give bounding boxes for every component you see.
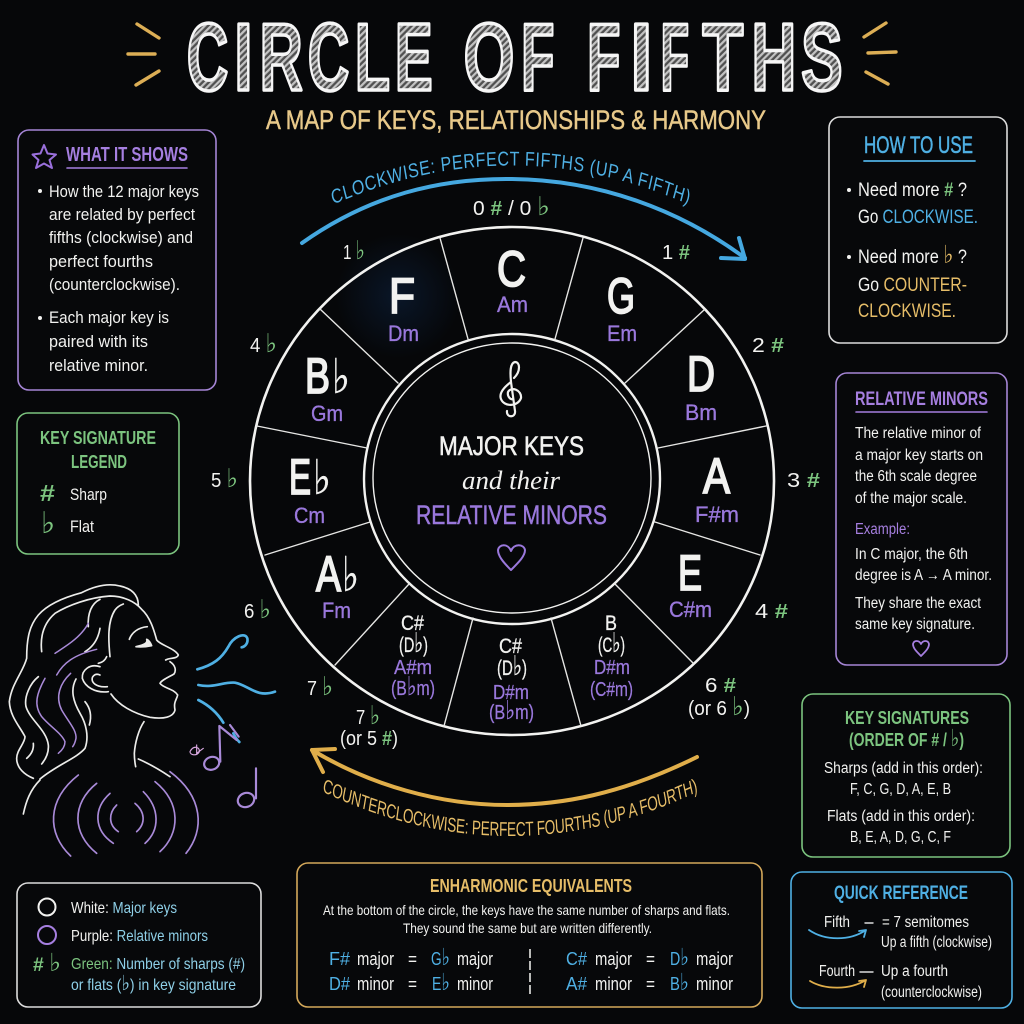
row: F sharp and G flat: G♭ <box>431 943 450 971</box>
panel: key signature legend: Flat <box>70 517 94 536</box>
row: D sharp and E flat: minor <box>595 974 632 994</box>
woman head and hair outline <box>9 585 178 779</box>
signature label: 6 sharps or 6 flats <box>688 675 750 722</box>
segment: B / D#m: (C#m) <box>590 679 633 701</box>
signature label: 6 sharps or 6 flats: (or 6 ♭) <box>688 692 750 722</box>
panel: key signature legend: ♭ <box>41 506 55 541</box>
panel: quick reference: Up a fourth <box>881 963 948 980</box>
panel: how to use: HOW TO USE <box>864 132 973 159</box>
row: F sharp and G flat: major <box>357 949 394 969</box>
title: H <box>751 4 796 111</box>
segment: C# bottom: C# <box>499 635 522 658</box>
panel: relative minors: The relative minor of <box>855 425 982 442</box>
row: D sharp and E flat: E♭ <box>432 968 450 996</box>
text block: what it shows bullets: (counterclockwise). <box>49 275 180 294</box>
segment: D / Bm <box>685 346 717 425</box>
chart: circle of fifths wheel <box>250 227 774 735</box>
segment: C / Am <box>497 241 528 317</box>
segment: F / Dm <box>388 268 419 346</box>
signature label: 5 flats: 5 ♭ <box>211 464 238 494</box>
panel: key signature legend <box>17 413 179 554</box>
title <box>187 4 843 111</box>
purple music notes <box>202 725 256 809</box>
panel: colour legend <box>17 883 261 1007</box>
segment: Bb / Gm <box>305 348 350 426</box>
signature label: 0 sharps 0 flats: 0 # / 0 ♭ <box>473 192 550 222</box>
segment: Eb / Cm: E <box>289 449 311 505</box>
panel: colour legend: or flats (♭) in key signature <box>71 971 236 995</box>
title: F <box>521 4 554 111</box>
row: D sharp and E flat <box>329 968 733 996</box>
segment: C / Am: Am <box>497 292 528 317</box>
panel: key signature legend: LEGEND <box>71 452 127 472</box>
segment: E / C#m: C#m <box>669 597 712 622</box>
icon: heart <box>498 545 525 570</box>
segment: Bb / Gm: B <box>305 348 330 404</box>
panel: quick reference: Up a fifth (clockwise) <box>881 934 992 951</box>
title: F <box>660 4 689 111</box>
signature label: 3 sharps: 3 # <box>787 470 820 492</box>
panel: how to use: CLOCKWISE. <box>858 301 956 322</box>
segment: Eb / Cm: Cm <box>294 503 325 528</box>
panel: colour legend: White: Major keys <box>71 900 177 917</box>
segment: A / F#m <box>695 448 739 527</box>
signature label: 7 flats or 5 sharps: 7 ♭ <box>356 701 380 731</box>
row: D sharp and E flat: minor <box>357 974 394 994</box>
panel: relative minors: In C major, the 6th <box>855 546 968 563</box>
panel: key signature legend: # <box>40 480 55 506</box>
panel: relative minors: the 6th scale degree <box>855 468 977 485</box>
title: L <box>355 4 390 111</box>
segment: C# bottom: (D♭) <box>497 651 527 682</box>
row: D sharp and E flat: D# <box>329 974 350 994</box>
segment: E / C#m <box>669 545 712 622</box>
icon: white circle <box>38 898 56 916</box>
signature label: 7 flats or 5 sharps: (or 5 #) <box>340 728 398 750</box>
segment: Ab / Fm <box>316 546 359 623</box>
segment: C# left: (D♭) <box>399 628 428 659</box>
title: E <box>395 4 433 111</box>
panel: key signatures order: Sharps (add in this order): <box>824 760 983 777</box>
row: F sharp and G flat: = <box>408 949 417 969</box>
title: I <box>234 4 253 111</box>
segment: B / D#m: (C♭) <box>598 628 625 659</box>
segment: G / Em: Em <box>607 321 637 346</box>
segment: C# left <box>391 612 435 702</box>
text block: what it shows bullets <box>38 182 199 375</box>
signature label: 1 sharp: 1 # <box>662 242 690 264</box>
panel: relative minors: a major key starts on <box>855 447 983 464</box>
segment: A / F#m: F#m <box>695 502 739 527</box>
title: C <box>308 4 349 111</box>
arrow: clockwise blue arc <box>302 179 745 259</box>
panel: how to use: Need more # ? <box>858 180 967 201</box>
panel: enharmonic equivalents: They sound the same but are written differently. <box>403 920 652 936</box>
illustration: singing woman <box>9 585 275 856</box>
panel: relative minors: same key signature. <box>855 616 975 633</box>
text block: what it shows bullets: Each major key is <box>49 308 169 327</box>
panel: key signatures order: F, C, G, D, A, E, B <box>850 781 951 798</box>
panel: key signatures order: (ORDER OF # / ♭) <box>849 724 964 752</box>
segment: C# left: C# <box>401 612 424 635</box>
title: O <box>464 4 514 111</box>
wheel rings <box>250 227 774 735</box>
segment: C / Am: C <box>497 241 526 297</box>
text block: what it shows bullets: fifths (clockwise) and <box>49 228 193 247</box>
signature label: 7 flats: 7 ♭ <box>307 672 333 702</box>
segment: A / F#m: A <box>703 448 731 504</box>
panel: relative minors: They share the exact <box>855 595 982 612</box>
icon: treble clef <box>500 362 521 416</box>
panel: relative minors: degree is A → A minor. <box>855 567 992 584</box>
center label: and their <box>462 466 561 495</box>
heading: what it shows: WHAT IT SHOWS <box>66 144 188 166</box>
row: F sharp and G flat: major <box>595 949 632 969</box>
text block: what it shows bullets: relative minor. <box>49 356 148 375</box>
center label <box>416 362 607 570</box>
subtitle: A MAP OF KEYS, RELATIONSHIPS & HARMONY <box>266 105 766 135</box>
arrow: counterclockwise gold arc <box>312 749 697 805</box>
signature label: 4 sharps: 4 # <box>755 601 788 623</box>
signature label: 6 sharps or 6 flats: 6 # <box>705 675 736 697</box>
segment: B / D#m: D#m <box>594 657 630 679</box>
signature label: 6 flats: 6 ♭ <box>244 595 271 625</box>
segment: Bb / Gm: ♭ <box>332 349 350 405</box>
title: C <box>187 4 228 111</box>
segment: D / Bm: Bm <box>685 400 717 425</box>
segment: Eb / Cm <box>289 449 331 528</box>
row: D sharp and E flat: minor <box>457 974 493 994</box>
decorative gold rays right of title <box>864 23 896 84</box>
arrow: fifth <box>809 930 866 938</box>
row: F sharp and G flat: F# <box>329 949 350 969</box>
panel: enharmonic equivalents: ENHARMONIC EQUIVALENTS <box>430 876 632 896</box>
segment: G / Em: G <box>607 268 635 324</box>
label: counterclockwise text: COUNTERCLOCKWISE: PERFECT FOURTHS (UP A FOURTH) <box>324 779 697 836</box>
panel: quick reference <box>791 872 1012 1008</box>
row: F sharp and G flat: major <box>696 949 733 969</box>
panel: how to use: Go CLOCKWISE. <box>858 207 978 228</box>
row: F sharp and G flat <box>329 943 733 971</box>
segment: C# left: A#m <box>394 657 432 679</box>
segment: F / Dm: Dm <box>388 321 419 346</box>
panel: relative minors <box>836 373 1007 665</box>
text block: what it shows bullets: How the 12 major keys <box>49 182 199 201</box>
small pink scribble <box>190 745 203 755</box>
panel: quick reference: (counterclockwise) <box>881 984 982 1001</box>
title: S <box>801 4 843 111</box>
title: I <box>630 4 653 111</box>
panel: key signatures order: Flats (add in this order): <box>827 808 975 825</box>
text block: what it shows bullets: are related by perfect <box>49 205 195 224</box>
panel: how to use: Go COUNTER- <box>858 275 967 296</box>
segment: F / Dm: F <box>389 268 415 324</box>
purple hair strands <box>37 623 97 753</box>
panel: how to use <box>829 117 1007 343</box>
highlight: F segment glow <box>336 234 460 358</box>
blue breath lines <box>197 635 275 742</box>
segment: C# bottom: (B♭m) <box>489 696 534 726</box>
row: D sharp and E flat: B♭ <box>670 968 689 996</box>
panel: quick reference: = 7 semitomes <box>882 914 969 931</box>
row: F sharp and G flat: C# <box>566 949 587 969</box>
segment: Bb / Gm: Gm <box>311 401 343 426</box>
shoulders <box>23 780 40 814</box>
panel: key signatures order: KEY SIGNATURES <box>845 708 969 728</box>
panel: enharmonic equivalents <box>297 863 762 1007</box>
panel: colour legend: Purple: Relative minors <box>71 928 208 945</box>
panel: quick reference: Fourth <box>819 963 855 980</box>
panel: quick reference: QUICK REFERENCE <box>834 883 968 904</box>
purple sound waves <box>54 772 198 856</box>
row: F sharp and G flat: major <box>457 949 493 969</box>
signature label: 4 flats: 4 ♭ <box>250 329 277 359</box>
row: F sharp and G flat: = <box>646 949 655 969</box>
title: F <box>587 4 620 111</box>
segment: Ab / Fm: ♭ <box>342 547 359 603</box>
panel: key signature legend: KEY SIGNATURE <box>40 428 156 448</box>
signature label: 1 flat: 1 ♭ <box>343 236 365 266</box>
icon: small heart <box>913 641 929 656</box>
panel: key signatures order <box>802 694 1010 857</box>
panel: relative minors: Example: <box>855 521 910 538</box>
panel: key signatures order: B, E, A, D, G, C, F <box>850 829 951 846</box>
decorative gold rays left of title <box>128 24 159 85</box>
signature label: 2 sharps: 2 # <box>752 335 784 357</box>
panel: quick reference: Fifth <box>824 914 850 931</box>
panel: enharmonic equivalents: At the bottom of the circle, the keys have the same number of sharps and flats. <box>323 902 730 918</box>
center label: RELATIVE MINORS <box>416 500 607 530</box>
panel: relative minors: RELATIVE MINORS <box>855 389 988 410</box>
center label: MAJOR KEYS <box>439 431 584 461</box>
panel: key signature legend: Sharp <box>70 485 107 504</box>
row: D sharp and E flat: minor <box>696 974 733 994</box>
segment: D / Bm: D <box>687 346 715 402</box>
segment: B / D#m <box>590 612 633 701</box>
panel: what it shows <box>18 130 216 390</box>
segment: C# left: (B♭m) <box>391 672 435 702</box>
text block: what it shows bullets: paired with its <box>49 332 148 351</box>
segment: C# bottom: D#m <box>493 682 529 704</box>
icon: purple circle <box>38 926 56 944</box>
segment: Eb / Cm: ♭ <box>313 450 331 506</box>
title: T <box>702 4 743 111</box>
arrow: fourth <box>810 980 866 988</box>
segment: Ab / Fm: A <box>316 546 341 602</box>
panel: relative minors: of the major scale. <box>855 490 967 507</box>
row: D sharp and E flat: = <box>646 974 655 994</box>
segment: B / D#m: B <box>605 612 617 635</box>
icon: sharp and flat: # ♭ <box>33 948 61 977</box>
row: D sharp and E flat: A# <box>566 974 587 994</box>
segment: Ab / Fm: Fm <box>322 598 351 623</box>
label: clockwise text: CLOCKWISE: PERFECT FIFTHS (UP A FIFTH) <box>332 152 690 207</box>
signature label: 7 flats or 5 sharps <box>340 701 398 750</box>
row: D sharp and E flat: = <box>408 974 417 994</box>
segment: C# bottom <box>489 635 534 726</box>
icon: star <box>32 145 56 168</box>
text block: what it shows bullets: perfect fourths <box>49 252 153 271</box>
row: F sharp and G flat: D♭ <box>670 943 689 971</box>
panel: how to use: Need more ♭ ? <box>858 240 967 269</box>
segment: G / Em <box>607 268 637 346</box>
title: R <box>260 4 303 111</box>
segment: E / C#m: E <box>678 545 702 601</box>
panel: colour legend: Green: Number of sharps (#) <box>71 956 245 973</box>
